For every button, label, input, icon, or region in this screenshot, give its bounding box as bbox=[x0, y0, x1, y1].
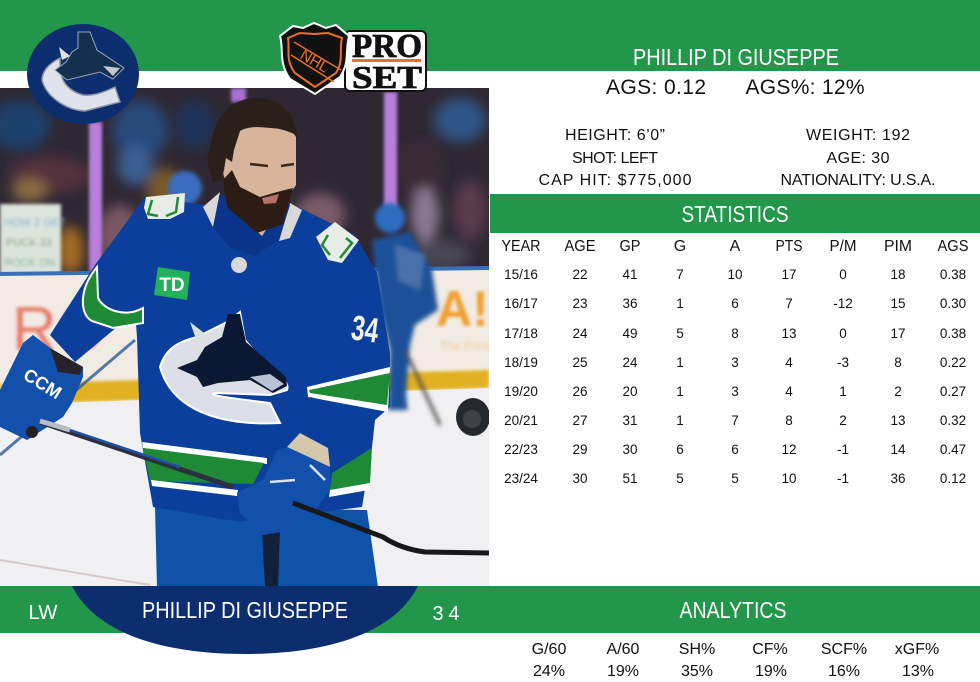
table header: AGE bbox=[564, 238, 596, 255]
metric values: 24% bbox=[533, 663, 565, 680]
photo: blurred crowd background: PUCK 33 bbox=[6, 237, 52, 249]
table row 19/20: 0.27 bbox=[940, 384, 966, 399]
photo: background player bbox=[168, 171, 440, 425]
beard bbox=[223, 170, 293, 233]
NHL Pro Set logo bbox=[280, 23, 426, 95]
puck bbox=[456, 398, 490, 436]
table row 16/17: 15 bbox=[890, 296, 906, 311]
hair bbox=[207, 98, 298, 183]
table row 20/21: 13 bbox=[890, 413, 906, 428]
statistics table bbox=[502, 238, 968, 486]
table row 16/17: 23 bbox=[572, 296, 588, 311]
table row 16/17: -12 bbox=[833, 296, 853, 311]
bottom green banner bbox=[0, 586, 980, 633]
metric labels bbox=[532, 641, 939, 658]
table row 20/21: 27 bbox=[572, 413, 588, 428]
player bio right bbox=[780, 127, 936, 189]
table row 23/24 bbox=[504, 471, 966, 486]
table header: PIM bbox=[884, 238, 912, 255]
forearm bbox=[310, 397, 324, 400]
eyes bbox=[250, 164, 294, 166]
hockey stick bbox=[40, 422, 233, 487]
table row 19/20: 2 bbox=[894, 384, 902, 399]
table row 15/16: 15/16 bbox=[504, 267, 538, 282]
table row 23/24: 10 bbox=[781, 471, 797, 486]
table header: YEAR bbox=[502, 238, 540, 255]
table row 15/16: 41 bbox=[622, 267, 638, 282]
navy name plate: PHILLIP DI GIUSEPPE bbox=[142, 597, 348, 623]
AGS summary: AGS: 0.12 bbox=[606, 76, 706, 99]
table row 18/19: 25 bbox=[572, 355, 588, 370]
sleeve stripe right bbox=[307, 367, 390, 412]
table row 15/16: 7 bbox=[676, 267, 684, 282]
table row 19/20: 4 bbox=[785, 384, 793, 399]
metric labels: SCF% bbox=[821, 641, 867, 658]
table row 17/18: 13 bbox=[781, 326, 797, 341]
table row 17/18: 5 bbox=[676, 326, 684, 341]
metric labels: G/60 bbox=[532, 641, 566, 658]
table header: A bbox=[730, 238, 741, 255]
table row 19/20: 26 bbox=[572, 384, 588, 399]
TD patch bbox=[154, 267, 190, 300]
table row 19/20 bbox=[504, 384, 966, 399]
table row 17/18: 0.38 bbox=[940, 326, 966, 341]
table row 23/24: 0.12 bbox=[940, 471, 966, 486]
table row 16/17: 36 bbox=[622, 296, 638, 311]
table row 16/17: 16/17 bbox=[504, 296, 538, 311]
photo: blurred crowd background: HOW 2 GET bbox=[4, 217, 66, 229]
table row 22/23: 30 bbox=[622, 442, 638, 457]
table row 18/19: 0.22 bbox=[940, 355, 966, 370]
player bio left: HEIGHT: 6’0” bbox=[565, 127, 665, 144]
table row 17/18: 8 bbox=[731, 326, 739, 341]
NHL Pro Set logo: SET bbox=[352, 59, 422, 95]
photo: hockey player: CCM bbox=[20, 364, 65, 403]
table row 20/21: 7 bbox=[731, 413, 739, 428]
collar bbox=[203, 192, 302, 241]
table row 16/17: 0.30 bbox=[940, 296, 966, 311]
ear bbox=[222, 164, 225, 176]
table row 15/16: 10 bbox=[727, 267, 743, 282]
table row 15/16 bbox=[504, 267, 966, 282]
analytics metrics bbox=[532, 641, 939, 680]
table row 17/18: 17/18 bbox=[504, 326, 538, 341]
table row 15/16: 17 bbox=[781, 267, 797, 282]
photo: hockey player: TD bbox=[159, 275, 185, 296]
table row 22/23: -1 bbox=[837, 442, 849, 457]
AGS summary: AGS%: 12% bbox=[746, 76, 864, 99]
photo: rink boards: The Pond bbox=[440, 339, 492, 353]
table row 20/21: 20/21 bbox=[504, 413, 538, 428]
table row 15/16: 0 bbox=[839, 267, 847, 282]
team logo badge bbox=[27, 24, 139, 124]
metric values: 13% bbox=[902, 663, 934, 680]
table header: P/M bbox=[830, 238, 856, 255]
table row 17/18: 0 bbox=[839, 326, 847, 341]
metric labels: SH% bbox=[679, 641, 715, 658]
table row 20/21: 1 bbox=[676, 413, 684, 428]
left glove bbox=[0, 335, 83, 440]
table row 22/23: 22/23 bbox=[504, 442, 538, 457]
metric values: 35% bbox=[681, 663, 713, 680]
number 34: 34 bbox=[349, 308, 381, 351]
photo: ice surface bbox=[0, 340, 489, 586]
table header: AGS bbox=[938, 238, 968, 255]
top green banner bbox=[0, 0, 980, 71]
pants bbox=[155, 507, 378, 587]
player bio left: SHOT: LEFT bbox=[572, 150, 658, 167]
player bio left bbox=[538, 127, 692, 189]
table row 22/23 bbox=[504, 442, 966, 457]
sleeve and jersey body bbox=[50, 197, 390, 522]
table row 16/17 bbox=[504, 296, 966, 311]
table row 22/23: 6 bbox=[731, 442, 739, 457]
table header: GP bbox=[620, 238, 640, 255]
table row 16/17: 1 bbox=[676, 296, 684, 311]
wrist tape bbox=[287, 433, 330, 467]
NHL Pro Set logo: NHL bbox=[297, 47, 331, 76]
table row 16/17: 6 bbox=[731, 296, 739, 311]
table row 17/18 bbox=[504, 326, 966, 341]
table row 18/19: 24 bbox=[622, 355, 638, 370]
table row 20/21: 8 bbox=[785, 413, 793, 428]
table row 22/23: 29 bbox=[572, 442, 588, 457]
position label: LW bbox=[28, 602, 58, 624]
player photo bbox=[0, 88, 492, 587]
orca crest bbox=[160, 312, 287, 423]
photo: blurred crowd background: ROCK ON bbox=[4, 257, 55, 269]
table row 15/16: 0.38 bbox=[940, 267, 966, 282]
metric values: 19% bbox=[607, 663, 639, 680]
player bio right: NATIONALITY: U.S.A. bbox=[780, 172, 936, 189]
jersey number: 34 bbox=[432, 603, 460, 625]
table row 15/16: 22 bbox=[572, 267, 588, 282]
player name heading: PHILLIP DI GIUSEPPE bbox=[633, 44, 839, 70]
table row 17/18: 17 bbox=[890, 326, 906, 341]
table row 23/24: -1 bbox=[837, 471, 849, 486]
table row 19/20: 3 bbox=[731, 384, 739, 399]
AGS summary bbox=[606, 76, 864, 99]
table row 23/24: 5 bbox=[676, 471, 684, 486]
table row 19/20: 1 bbox=[676, 384, 684, 399]
table header: G bbox=[674, 238, 686, 255]
white strip under banner bbox=[0, 71, 490, 88]
metric labels: CF% bbox=[752, 641, 788, 658]
metric labels: A/60 bbox=[607, 641, 640, 658]
photo: rink boards bbox=[0, 268, 492, 408]
table row 18/19: -3 bbox=[837, 355, 849, 370]
shoulder patches bbox=[144, 193, 185, 219]
player bio left: CAP HIT: $775,000 bbox=[538, 172, 692, 189]
table row 20/21: 0.32 bbox=[940, 413, 966, 428]
player bio right: WEIGHT: 192 bbox=[806, 127, 910, 144]
table row 22/23: 0.47 bbox=[940, 442, 966, 457]
neck and face bbox=[222, 125, 296, 236]
table row 19/20: 20 bbox=[622, 384, 638, 399]
table row 20/21: 2 bbox=[839, 413, 847, 428]
metric values: 16% bbox=[828, 663, 860, 680]
table row 23/24: 36 bbox=[890, 471, 906, 486]
table row 22/23: 14 bbox=[890, 442, 906, 457]
table row 23/24: 5 bbox=[731, 471, 739, 486]
photo: rink boards: RO bbox=[12, 295, 105, 364]
hem stripe bbox=[142, 442, 267, 464]
table row 17/18: 24 bbox=[572, 326, 588, 341]
table row 23/24: 23/24 bbox=[504, 471, 538, 486]
metric labels: xGF% bbox=[895, 641, 939, 658]
table row 18/19 bbox=[504, 355, 966, 370]
table row 16/17: 7 bbox=[785, 296, 793, 311]
analytics heading: ANALYTICS bbox=[680, 597, 786, 623]
table row 18/19: 8 bbox=[894, 355, 902, 370]
metric values bbox=[533, 663, 934, 680]
table row 19/20: 19/20 bbox=[504, 384, 538, 399]
photo: blurred crowd background bbox=[0, 88, 489, 278]
table row 22/23: 12 bbox=[781, 442, 797, 457]
table row 18/19: 18/19 bbox=[504, 355, 538, 370]
table header bbox=[502, 238, 968, 255]
table row 18/19: 3 bbox=[731, 355, 739, 370]
sleeve stripe left bbox=[83, 267, 143, 328]
table row 20/21: 31 bbox=[622, 413, 638, 428]
metric values: 19% bbox=[755, 663, 787, 680]
right glove bbox=[237, 447, 330, 535]
table row 15/16: 18 bbox=[890, 267, 906, 282]
NHL Pro Set logo: PRO bbox=[352, 28, 422, 65]
table header: PTS bbox=[776, 238, 802, 255]
table row 20/21 bbox=[504, 413, 966, 428]
table row 23/24: 30 bbox=[572, 471, 588, 486]
table row 22/23: 6 bbox=[676, 442, 684, 457]
NHL neck badge bbox=[231, 257, 247, 273]
table row 18/19: 1 bbox=[676, 355, 684, 370]
player bio right: AGE: 30 bbox=[826, 150, 890, 167]
statistics banner bbox=[490, 194, 980, 233]
photo: rink boards: A! bbox=[436, 281, 489, 337]
table row 17/18: 49 bbox=[622, 326, 638, 341]
statistics banner: STATISTICS bbox=[682, 201, 788, 227]
navy name plate bbox=[72, 586, 418, 654]
table row 18/19: 4 bbox=[785, 355, 793, 370]
table row 19/20: 1 bbox=[839, 384, 847, 399]
table row 23/24: 51 bbox=[622, 471, 638, 486]
photo: hockey player bbox=[0, 98, 490, 587]
